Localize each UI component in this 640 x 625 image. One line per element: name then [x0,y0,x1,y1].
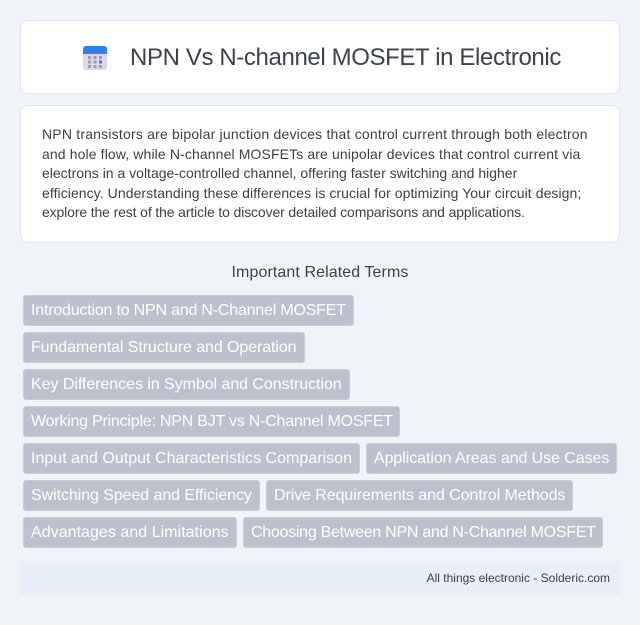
intro paragraph: NPN transistors are bipolar junction devices that control current through both electron [42,126,588,142]
intro paragraph: and hole flow, while N-channel MOSFETs are unipolar devices that control current via [42,146,580,162]
tag list [23,295,617,548]
tag [23,443,360,474]
tag: Input and Output Characteristics Comparison [31,450,352,467]
intro paragraph: efficiency. Understanding these differences is crucial for optimizing Your circuit design; [42,184,581,200]
header card [20,20,620,94]
intro paragraph: electrons in a voltage-controlled channel, offering faster switching and higher [42,165,517,181]
tag: Drive Requirements and Control Methods [274,487,565,504]
tag: Fundamental Structure and Operation [31,339,296,356]
tag [23,369,350,400]
tag: Working Principle: NPN BJT vs N-Channel MOSFET [31,413,393,430]
tag: Key Differences in Symbol and Construction [31,376,342,393]
section heading: Important Related Terms [232,264,408,281]
tag: Switching Speed and Efficiency [31,487,252,504]
tag [266,480,573,511]
tag [23,480,260,511]
tag: Choosing Between NPN and N-Channel MOSFET [251,524,596,541]
tag [23,517,237,548]
intro card [20,105,620,243]
tag [23,406,400,437]
footer bar: All things electronic - Solderic.com [427,571,610,585]
intro paragraph [42,126,588,220]
tag: Application Areas and Use Cases [374,450,609,467]
footer bar [20,561,620,595]
intro paragraph: explore the rest of the article to discover detailed comparisons and applications. [42,204,525,220]
tag [243,517,603,548]
tag [23,332,305,363]
tag [23,295,354,326]
tag: Advantages and Limitations [31,524,229,541]
tag: Introduction to NPN and N-Channel MOSFET [31,302,346,319]
icon: calendar [83,46,107,70]
title: NPN Vs N-channel MOSFET in Electronic [130,44,561,71]
tag [366,443,617,474]
